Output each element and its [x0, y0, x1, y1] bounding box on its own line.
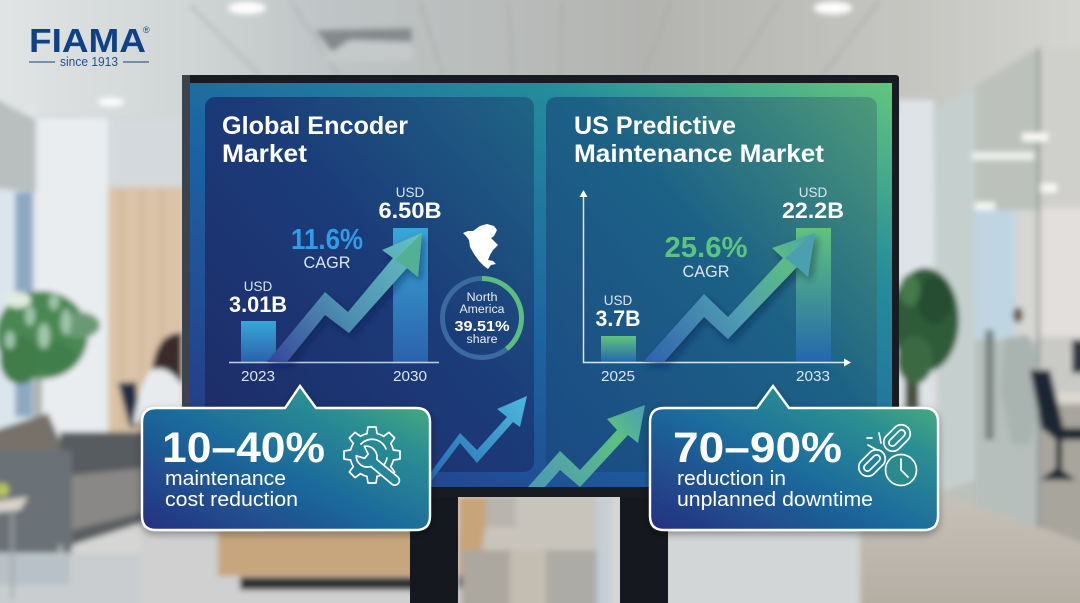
sofa — [0, 413, 64, 450]
year labels: 2033 — [796, 369, 830, 385]
stat description: cost reduction — [165, 489, 298, 511]
panel: us predictive maintenance market — [546, 97, 877, 472]
growth arrow — [267, 233, 422, 362]
stand legs — [410, 495, 668, 603]
year labels — [241, 369, 427, 385]
stat: 10–40% — [162, 424, 325, 472]
year labels — [601, 369, 830, 385]
donut: north america share: 39.51% — [454, 318, 510, 335]
heading: Market — [222, 140, 308, 168]
ceiling lights reflected — [1022, 133, 1048, 141]
panel: global encoder market — [205, 97, 534, 472]
floor left — [0, 553, 220, 603]
heading — [222, 112, 408, 168]
stat description: maintenance — [165, 468, 286, 490]
pedestal — [668, 528, 860, 603]
stat description — [165, 468, 298, 511]
heading: Maintenance Market — [574, 140, 825, 168]
value 2033 — [782, 185, 844, 223]
logo — [29, 22, 150, 69]
value 2033: 22.2B — [782, 198, 844, 223]
value 2023: 3.01B — [229, 292, 287, 317]
callout: maintenance cost reduction — [142, 386, 430, 530]
icon: north america map — [463, 224, 498, 269]
floor right — [858, 420, 1080, 603]
glass partition — [933, 48, 1038, 527]
value 2030 — [378, 185, 442, 223]
side table — [0, 497, 28, 513]
cagr: 25.6% — [664, 232, 748, 264]
cagr: CAGR — [304, 253, 350, 272]
bar chart: predictive maintenance market — [580, 190, 851, 366]
cagr — [664, 232, 748, 281]
screen — [190, 83, 892, 487]
value 2025 — [596, 293, 640, 331]
cagr: 11.6% — [291, 224, 363, 256]
cagr: CAGR — [682, 262, 730, 281]
growth arrow — [643, 233, 815, 362]
donut: north america share — [442, 278, 522, 358]
figures behind glass — [1013, 307, 1023, 323]
value 2033: USD — [799, 185, 827, 200]
donut: north america share: share — [466, 334, 498, 346]
donut: north america share: America — [460, 304, 505, 316]
person — [118, 382, 140, 428]
bar chart: encoder market — [229, 228, 439, 362]
monitor — [182, 75, 899, 497]
heading — [574, 112, 825, 168]
callout: unplanned downtime reduction — [650, 386, 938, 530]
decorative arrow: left panel — [425, 396, 527, 480]
stat description: unplanned downtime — [677, 489, 873, 511]
logo wordmark: FIAMA — [29, 22, 146, 59]
year labels: 2030 — [393, 369, 427, 385]
icon: gear and wrench — [344, 427, 405, 491]
value 2030: 6.50B — [378, 198, 442, 223]
decorative arrow: right panel — [528, 405, 645, 487]
icon: broken chain and clock — [855, 421, 916, 486]
value 2025: USD — [604, 293, 632, 308]
value 2025: 3.7B — [596, 306, 640, 331]
heading: US Predictive — [574, 112, 736, 140]
year labels: 2025 — [601, 369, 635, 385]
registered mark: ® — [143, 25, 150, 35]
left wall and window — [0, 110, 36, 430]
stat: 70–90% — [673, 424, 842, 472]
donut: north america share: North — [466, 292, 498, 304]
value 2023: USD — [244, 279, 272, 294]
cagr — [291, 224, 363, 272]
stat description — [677, 468, 873, 511]
tagline: since 1913 — [60, 55, 118, 69]
monitor frame — [182, 75, 899, 497]
right wall — [898, 100, 934, 492]
plant left — [34, 375, 42, 425]
wood table and floor behind the stand — [200, 530, 490, 603]
ceiling — [0, 0, 1080, 115]
value 2023 — [229, 279, 287, 317]
plant right — [905, 370, 919, 410]
stat description: reduction in — [677, 468, 786, 490]
year labels: 2023 — [241, 369, 275, 385]
value 2030: USD — [396, 185, 424, 200]
heading: Global Encoder — [222, 112, 408, 140]
